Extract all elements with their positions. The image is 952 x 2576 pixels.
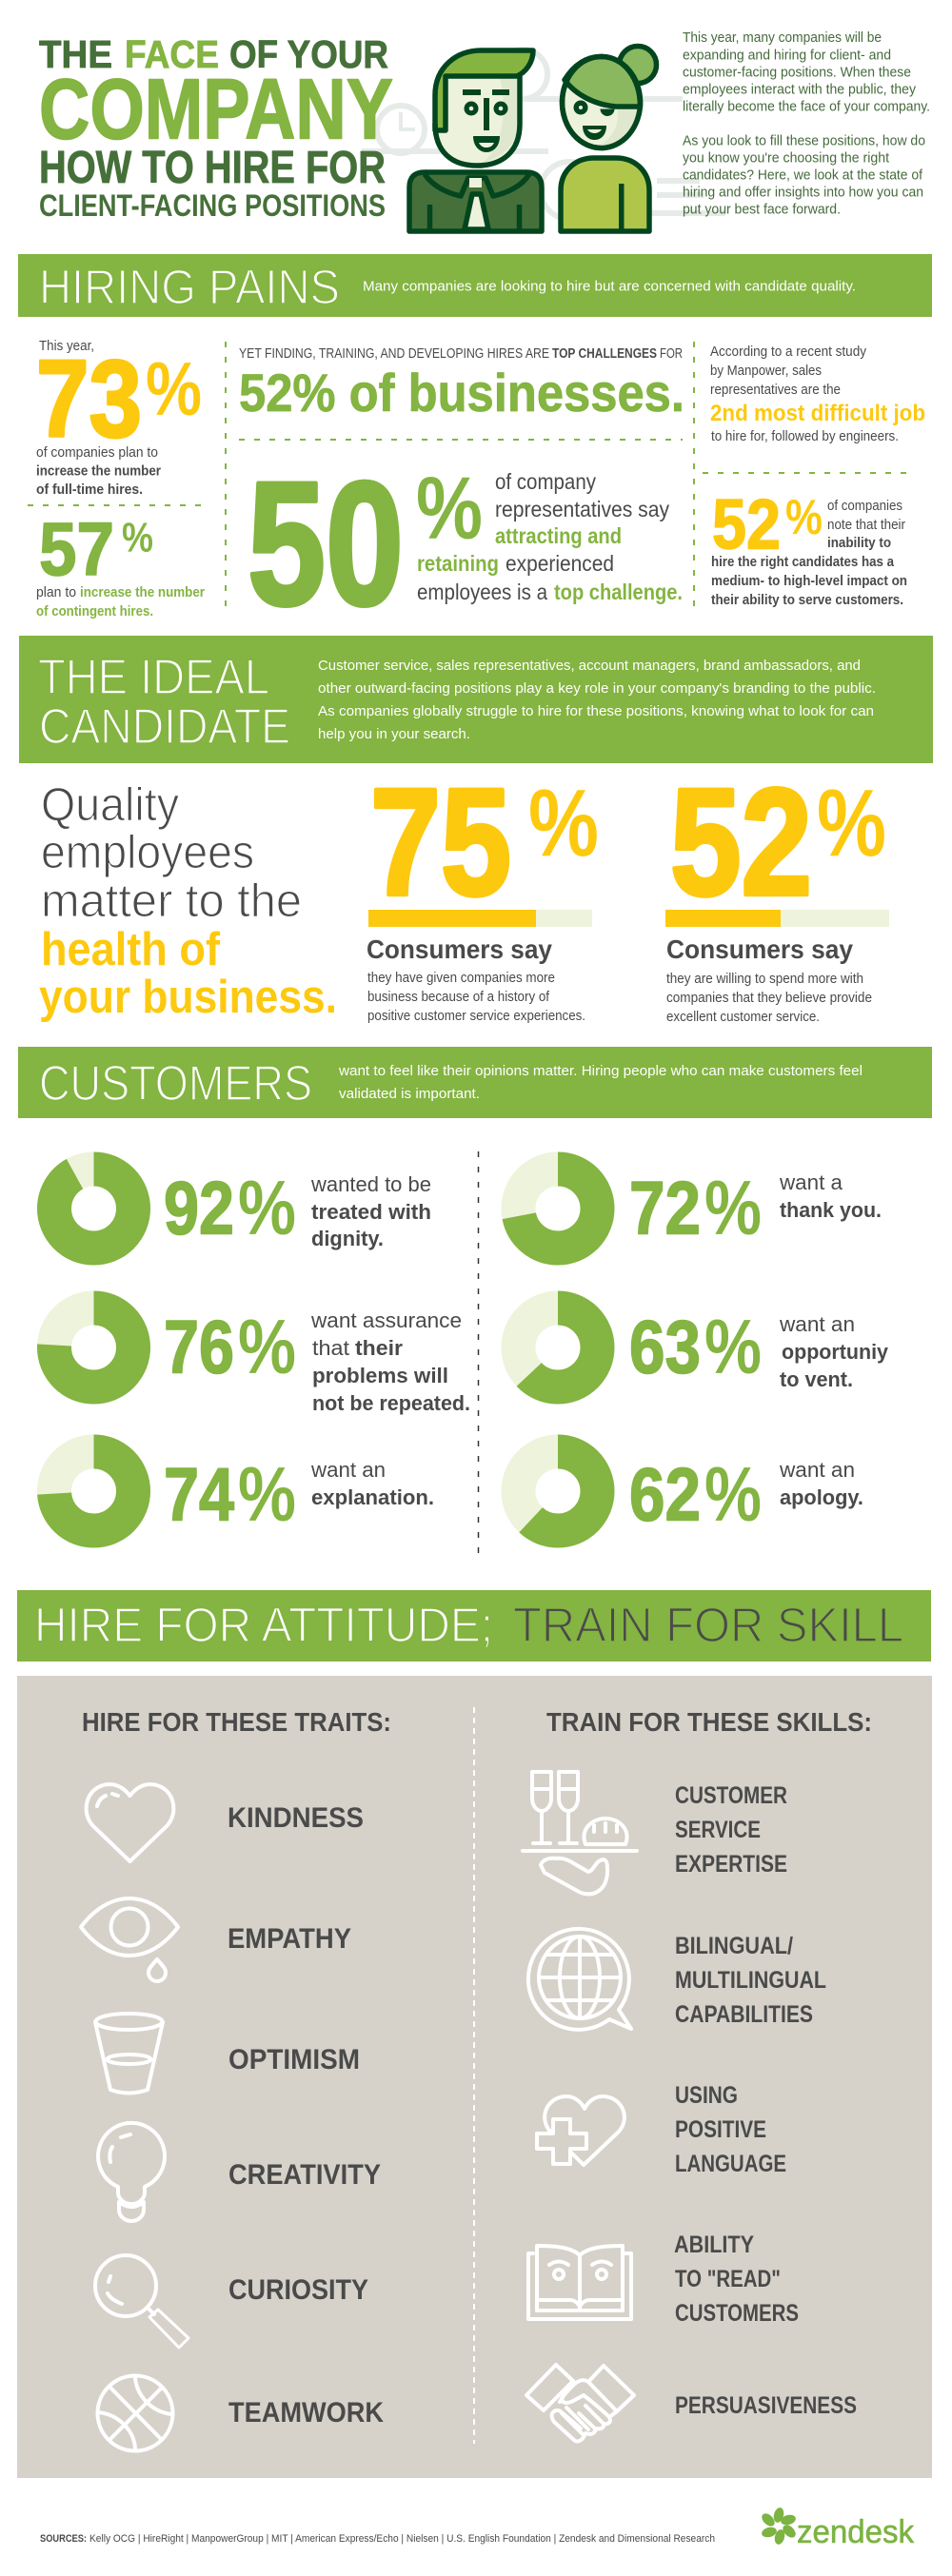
stat: 50 percent: retaining xyxy=(417,551,499,576)
trait: kindness: KINDNESS xyxy=(228,1802,364,1834)
stat: 50 percent: of company xyxy=(495,469,596,494)
title: OF YOUR xyxy=(229,32,388,76)
intro text: customer-facing positions. When these xyxy=(683,65,911,80)
donut: 76 percent: want assurance xyxy=(310,1308,462,1332)
banner: customers xyxy=(18,1047,932,1118)
heading: traits: HIRE FOR THESE TRAITS: xyxy=(82,1707,391,1737)
trait: optimism: OPTIMISM xyxy=(228,2044,360,2075)
stat: 52 percent consumers: 52 xyxy=(670,757,812,927)
banner: hiring pains: Many companies are looking to hire but are concerned with candidate quality. xyxy=(363,278,856,295)
icon: heart with cross xyxy=(537,2096,625,2165)
banner: the ideal candidate: other outward-facing positions play a key role in your company's branding to the public. xyxy=(318,680,876,697)
skill: multilingual capabilities: MULTILINGUAL xyxy=(675,1967,826,1994)
logo: zendesk: zendesk xyxy=(797,2514,915,2550)
donut: 92 percent: 92 xyxy=(164,1165,234,1250)
stat: 73 percent: of companies plan to xyxy=(36,444,158,461)
skill: multilingual capabilities xyxy=(675,1933,826,2028)
stat: 52 percent consumers: excellent customer service. xyxy=(666,1010,820,1025)
stat: manpower study: representatives are the xyxy=(710,382,841,398)
donut: 74 percent xyxy=(54,1452,434,1538)
banner: the ideal candidate: CANDIDATE xyxy=(39,699,290,755)
donut: 92 percent: wanted to be xyxy=(310,1172,431,1196)
trait: teamwork: TEAMWORK xyxy=(228,2397,384,2429)
stat: 50 percent: employees is a xyxy=(417,580,547,604)
trait: empathy: EMPATHY xyxy=(228,1923,351,1955)
trait: creativity: CREATIVITY xyxy=(228,2159,381,2191)
stat: 57 percent: of contingent hires. xyxy=(36,603,153,619)
icon: magnifier xyxy=(95,2255,188,2348)
skill: ability to read customers xyxy=(674,2232,799,2327)
stat: 52 percent consumers: % xyxy=(817,770,886,876)
donut: 62 percent: 62 xyxy=(629,1452,701,1536)
intro text: expanding and hiring for client- and xyxy=(683,48,891,63)
skill: ability to read customers: ABILITY xyxy=(674,2232,754,2258)
banner: the ideal candidate: As companies globally struggle to hire for these positions, knowing what to look for can xyxy=(318,703,874,719)
donut: 72 percent: want a xyxy=(779,1170,843,1194)
skill: customer service expertise: EXPERTISE xyxy=(675,1851,787,1878)
stat: 52 percent consumers xyxy=(665,757,889,1025)
heading: quality employees: your business. xyxy=(39,972,337,1023)
stat: 52 percent of businesses: FOR xyxy=(660,346,683,362)
donut: 76 percent: % xyxy=(238,1305,296,1390)
banner: hiring pains: HIRING PAINS xyxy=(39,260,340,314)
donut: 63 percent: to vent. xyxy=(780,1367,853,1391)
stat: 50 percent: representatives say xyxy=(495,497,669,521)
heading: quality employees: Quality xyxy=(41,779,179,831)
donut: 72 percent: % xyxy=(704,1166,762,1251)
title: COMPANY xyxy=(39,63,393,158)
intro text xyxy=(683,29,930,217)
donut: 76 percent xyxy=(54,1304,470,1415)
title: THE xyxy=(39,32,112,76)
donut: 63 percent: 63 xyxy=(629,1304,701,1389)
skill: ability to read customers: TO "READ" xyxy=(675,2266,781,2292)
title: FACE xyxy=(125,32,219,76)
stat: 52 percent of companies: note that their xyxy=(827,517,905,533)
stat: 52 percent of companies xyxy=(711,485,907,608)
skill: using positive language: LANGUAGE xyxy=(675,2151,786,2177)
stat: 52 percent of companies: % xyxy=(785,490,823,545)
skill: customer service expertise: CUSTOMER xyxy=(675,1782,787,1809)
donut: 63 percent xyxy=(518,1304,889,1391)
stat: 75 percent consumers: % xyxy=(528,770,599,876)
stat: 50 percent: attracting and xyxy=(495,523,622,548)
heading: quality employees xyxy=(39,779,337,1023)
donut: 72 percent xyxy=(518,1165,882,1251)
banner: hire for attitude: TRAIN FOR SKILL xyxy=(513,1598,903,1652)
panel: traits and skills xyxy=(17,1676,932,2478)
donut: 76 percent: their xyxy=(355,1336,403,1360)
heading: quality employees: health of xyxy=(41,924,221,975)
title: HOW TO HIRE FOR xyxy=(39,143,386,193)
stat: 50 percent xyxy=(248,446,683,642)
icon: serving tray xyxy=(523,1772,637,1894)
title: CLIENT-FACING POSITIONS xyxy=(39,188,386,223)
stat: 50 percent: experienced xyxy=(506,551,614,576)
intro text: put your best face forward. xyxy=(683,202,841,217)
stat: 52 percent of companies: 52 xyxy=(712,485,781,563)
banner: customers: CUSTOMERS xyxy=(39,1056,312,1111)
banner: customers: validated is important. xyxy=(339,1087,480,1102)
stat: 73 percent: 73 xyxy=(36,339,142,461)
heading: skills: TRAIN FOR THESE SKILLS: xyxy=(546,1707,872,1737)
background faded icons xyxy=(362,49,725,219)
intro text: candidates? Here, we look at the state of xyxy=(683,167,923,183)
banner: hiring pains xyxy=(18,254,932,317)
stat: 52 percent consumers: Consumers say xyxy=(666,934,853,964)
donut: 63 percent: opportuniy xyxy=(782,1340,889,1364)
banner: hire for attitude xyxy=(17,1590,931,1662)
donut: 92 percent xyxy=(54,1165,431,1251)
stat: 57 percent: plan to xyxy=(36,584,76,600)
heading: quality employees: employees xyxy=(41,827,254,878)
stat: 50 percent: top challenge. xyxy=(554,580,683,604)
intro text: you know you're choosing the right xyxy=(683,150,890,166)
donut: 62 percent xyxy=(518,1452,863,1538)
stat: 57 percent: 57 xyxy=(39,506,114,591)
heading: quality employees: matter to the xyxy=(41,875,302,927)
banner: customers: want to feel like their opinions matter. Hiring people who can make customers feel xyxy=(338,1064,863,1079)
banner: hire for attitude: HIRE FOR ATTITUDE; xyxy=(34,1598,493,1652)
donut: 62 percent: want an xyxy=(779,1458,855,1482)
intro text: This year, many companies will be xyxy=(683,29,882,46)
donut: 62 percent: apology. xyxy=(780,1485,863,1509)
donut: 74 percent: want an xyxy=(310,1458,386,1482)
donut: 72 percent: thank you. xyxy=(780,1198,882,1222)
stat: 75 percent consumers: business because of a history of xyxy=(367,990,550,1005)
stat: 73 percent xyxy=(36,339,202,498)
stat: 52 percent of businesses: YET FINDING, TRAINING, AND DEVELOPING HIRES ARE xyxy=(239,346,549,362)
stat: 52 percent of companies: hire the right candidates has a xyxy=(711,554,895,570)
stat: manpower study: to hire for, followed by engineers. xyxy=(711,428,899,444)
stat: 52 percent of companies: inability to xyxy=(827,535,891,551)
donut: 76 percent: not be repeated. xyxy=(312,1391,470,1415)
intro text: employees interact with the public, they xyxy=(683,82,916,97)
skill: customer service expertise xyxy=(675,1782,787,1878)
stat: 73 percent: % xyxy=(146,346,202,431)
skill: customer service expertise: SERVICE xyxy=(675,1817,761,1843)
icon: handshake xyxy=(526,2365,634,2441)
icon: glass xyxy=(95,2014,163,2094)
banner: the ideal candidate: Customer service, sales representatives, account managers, brand ambassadors, and xyxy=(318,658,861,674)
skill: persuasiveness: PERSUASIVENESS xyxy=(675,2392,857,2419)
skill: using positive language: USING xyxy=(675,2082,738,2109)
logo: zendesk xyxy=(760,2507,915,2550)
stat: 75 percent consumers xyxy=(367,757,599,1024)
skill: multilingual capabilities: CAPABILITIES xyxy=(675,2001,813,2028)
stat: manpower study: 2nd most difficult job xyxy=(710,401,925,426)
skill: using positive language xyxy=(675,2082,786,2177)
banner: the ideal candidate: THE IDEAL xyxy=(38,650,269,705)
intro text: literally become the face of your company. xyxy=(683,99,930,114)
donut: 76 percent: problems will xyxy=(312,1364,448,1387)
stat: 57 percent: % xyxy=(122,514,153,561)
skill: multilingual capabilities: BILINGUAL/ xyxy=(675,1933,793,1959)
donut: 74 percent: 74 xyxy=(164,1452,234,1536)
banner: the ideal candidate: help you in your search. xyxy=(318,726,470,742)
sources: Kelly OCG | HireRight | ManpowerGroup | MIT | American Express/Echo | Nielsen | U.S. English Foundation | Zendesk and Dimensional Research xyxy=(89,2533,715,2545)
stat: 75 percent consumers: 75 xyxy=(370,757,511,927)
skill: ability to read customers: CUSTOMERS xyxy=(675,2300,799,2327)
stat: 52 percent of companies: medium- to high-level impact on xyxy=(711,573,907,589)
icon: globe speech bubble xyxy=(528,1929,631,2030)
banner: the ideal candidate xyxy=(19,636,933,763)
donut: 92 percent: % xyxy=(238,1166,296,1251)
stat: 52 percent of companies: their ability to serve customers. xyxy=(711,592,903,608)
stat: 52 percent of companies: of companies xyxy=(827,498,902,514)
donut: 92 percent: treated with xyxy=(311,1200,431,1224)
skill: using positive language: POSITIVE xyxy=(675,2116,766,2143)
stat: 52 percent consumers: they are willing to spend more with xyxy=(666,972,863,987)
trait: curiosity: CURIOSITY xyxy=(228,2274,368,2306)
donut: 63 percent: want an xyxy=(779,1312,855,1336)
donut: 74 percent: explanation. xyxy=(311,1485,434,1509)
stat: 57 percent xyxy=(36,506,205,619)
intro text: hiring and offer insights into how you can xyxy=(683,185,923,200)
intro text: As you look to fill these positions, how do xyxy=(683,133,925,148)
donut: 63 percent: % xyxy=(704,1305,762,1390)
donut: 92 percent: dignity. xyxy=(311,1227,384,1250)
illustration: woman xyxy=(561,46,657,231)
stat: 75 percent consumers: Consumers say xyxy=(367,934,552,964)
donut: 72 percent: 72 xyxy=(629,1165,701,1250)
donut: 62 percent: % xyxy=(704,1452,762,1538)
stat: 73 percent: increase the number xyxy=(36,462,161,480)
illustration: man xyxy=(409,50,542,231)
stat: manpower study xyxy=(710,344,925,444)
sources: SOURCES: xyxy=(40,2533,87,2545)
stat: manpower study: by Manpower, sales xyxy=(710,363,822,379)
icon: heart xyxy=(87,1784,173,1861)
stat: 73 percent: of full-time hires. xyxy=(36,482,143,498)
donut: 76 percent: 76 xyxy=(164,1304,234,1389)
stat: 52 percent of businesses: 52% of businesses. xyxy=(239,363,684,423)
stat: 73 percent: This year, xyxy=(39,339,94,354)
stat: 75 percent consumers: positive customer service experiences. xyxy=(367,1009,585,1024)
stat: 57 percent: increase the number xyxy=(80,584,205,600)
stat: 50 percent: 50 xyxy=(248,446,404,642)
icon: open book with eyes xyxy=(528,2246,631,2319)
icon: basketball xyxy=(97,2375,173,2451)
stat: 52 percent consumers: companies that they believe provide xyxy=(666,991,872,1006)
stat: manpower study: According to a recent study xyxy=(710,344,866,360)
donut: 76 percent: that xyxy=(312,1336,349,1360)
donut: 74 percent: % xyxy=(238,1452,296,1538)
stat: 52 percent of businesses: TOP CHALLENGES xyxy=(552,346,657,362)
icon: light bulb xyxy=(98,2123,165,2221)
stat: 50 percent: % xyxy=(416,459,483,558)
icon: eye xyxy=(81,1898,178,1981)
stat: 75 percent consumers: they have given companies more xyxy=(367,971,555,986)
title xyxy=(39,32,393,223)
